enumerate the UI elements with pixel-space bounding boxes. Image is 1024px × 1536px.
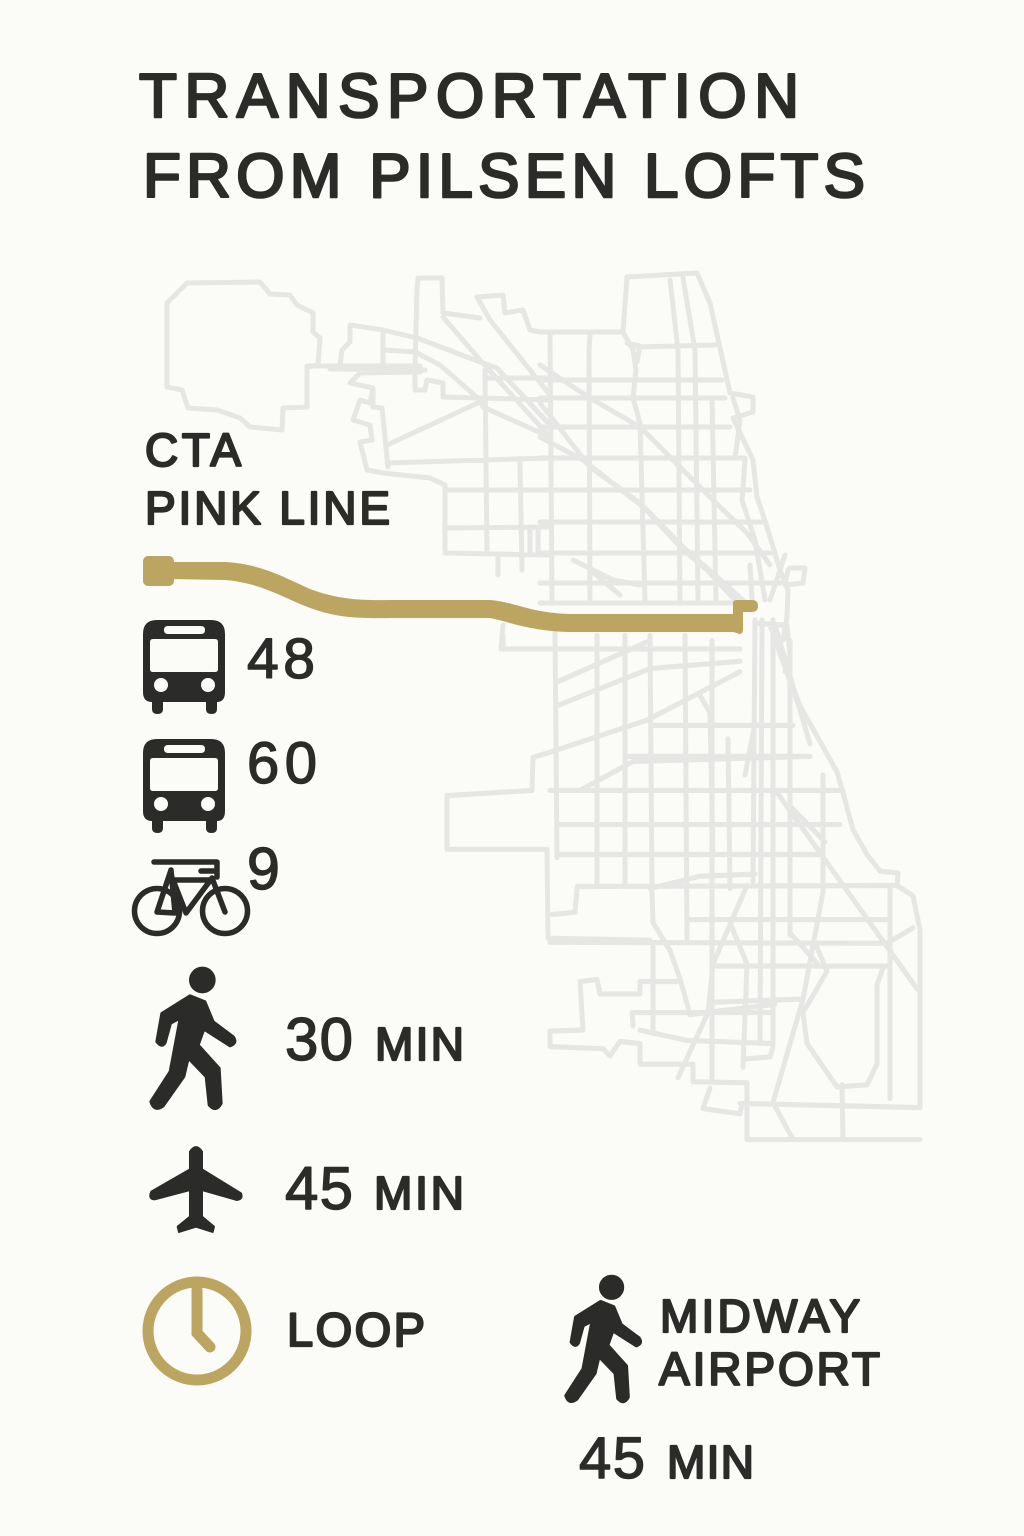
icon: airplane — [150, 1147, 242, 1232]
icon: bus 48 — [143, 620, 225, 714]
map: central south grid — [501, 620, 897, 1080]
label: Midway Airport: MIDWAY — [660, 1290, 860, 1342]
text: CTA Pink Line: PINK LINE — [145, 482, 390, 534]
title — [139, 62, 865, 211]
map: diagonals — [540, 365, 805, 602]
label: 9: 9 — [247, 836, 280, 902]
title: TRANSPORTATION — [139, 62, 799, 131]
title: FROM PILSEN LOFTS — [143, 142, 865, 211]
label: Midway 45 min — [579, 1426, 754, 1491]
label: Midway 45 min: 45 — [579, 1426, 645, 1491]
label: loop: LOOP — [287, 1303, 425, 1356]
map: northwest streets — [307, 278, 550, 575]
label: 30 min — [285, 1006, 464, 1073]
label: 45 min: 45 — [285, 1155, 353, 1222]
label: 30 min: 30 — [285, 1006, 353, 1073]
label: Midway Airport — [659, 1290, 880, 1395]
icon: bicycle — [134, 862, 248, 934]
label: 45 min: MIN — [374, 1167, 464, 1219]
icon: clock — [148, 1282, 246, 1380]
label: 30 min: MIN — [375, 1018, 464, 1070]
chicago street map — [167, 273, 920, 1140]
icon: bus 60 — [143, 739, 225, 833]
text: CTA Pink Line: CTA — [145, 424, 241, 476]
label: 45 min — [285, 1155, 464, 1222]
label: Midway Airport: AIRPORT — [659, 1343, 880, 1395]
map: west and southwest outline — [447, 757, 920, 1140]
map: north side — [540, 273, 788, 640]
text: CTA Pink Line — [145, 424, 390, 534]
icon: walking person — [151, 968, 235, 1109]
map: O'Hare outline — [167, 282, 320, 430]
map: lakefront and south side — [678, 672, 920, 1140]
label: 48: 48 — [247, 627, 315, 691]
icon: walking person to Midway — [566, 1276, 641, 1402]
label: Midway 45 min: MIN — [667, 1436, 754, 1488]
gold route line: CTA Pink Line — [143, 556, 758, 634]
label: 60: 60 — [247, 731, 317, 796]
